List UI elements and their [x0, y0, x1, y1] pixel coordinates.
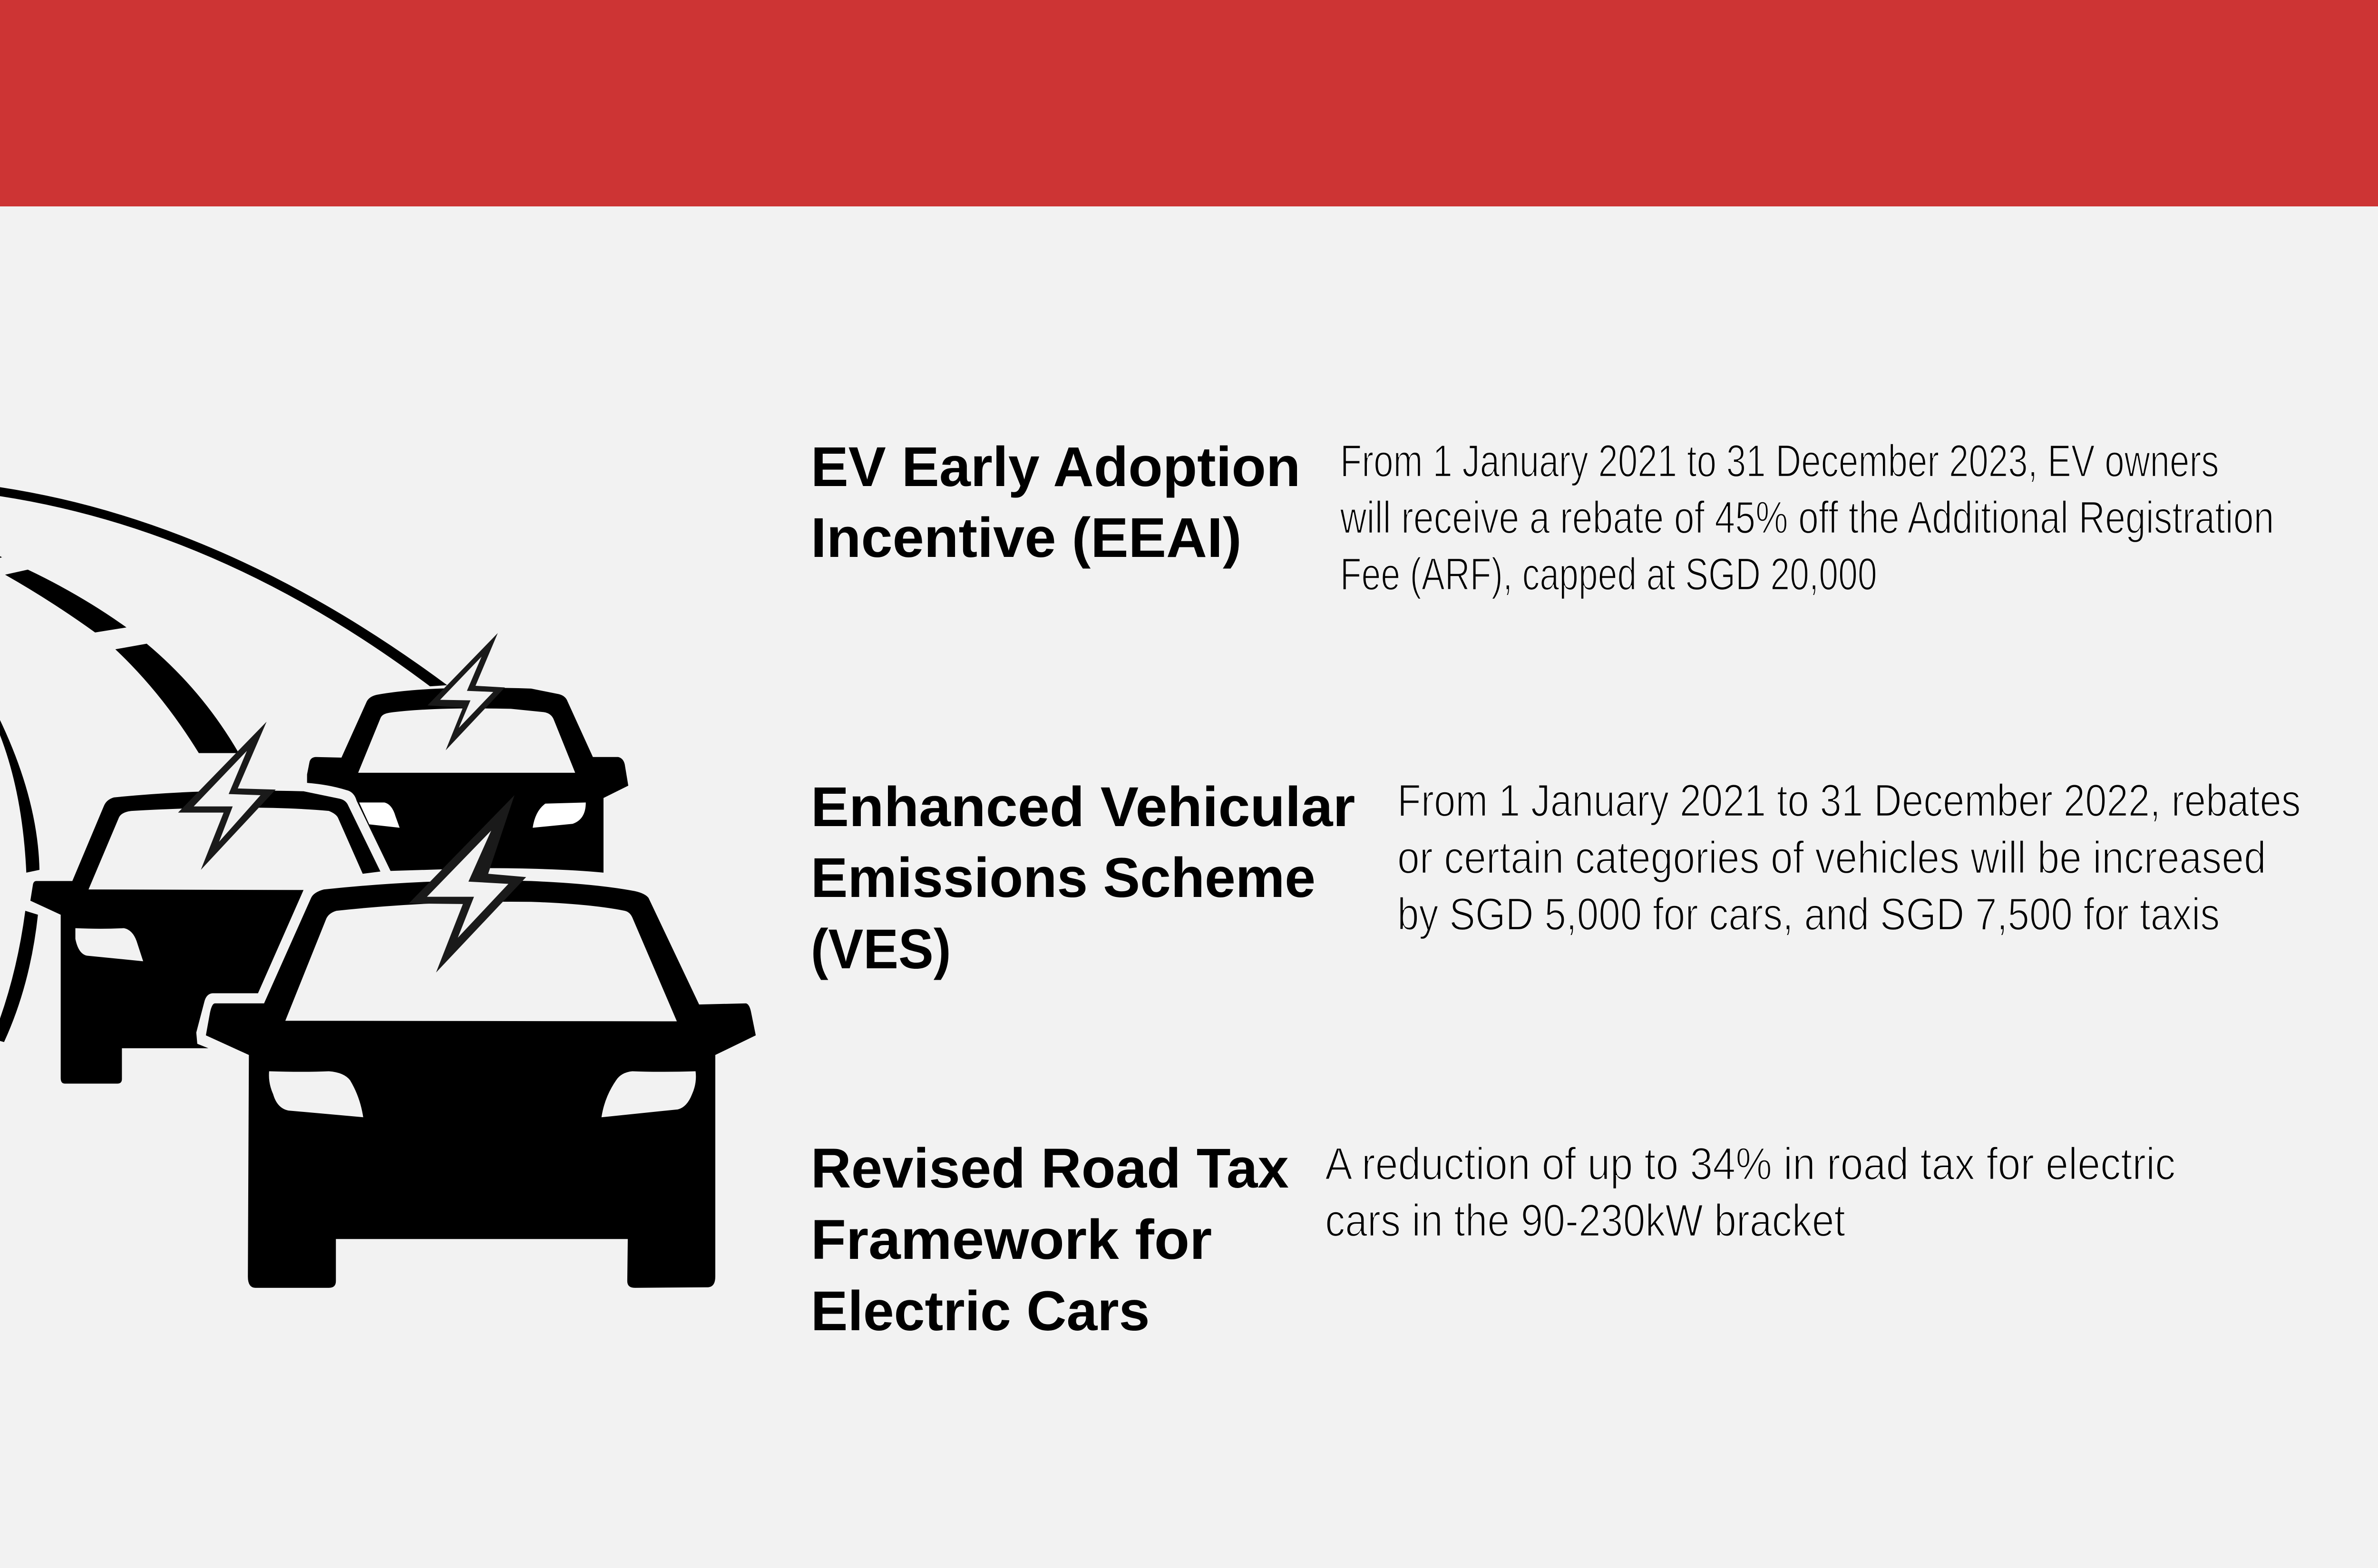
- heading: EV Early Adoption Incentive: [811, 435, 1300, 569]
- heading: Enhanced Vehicular Emissions Scheme: (VES): [811, 917, 951, 981]
- road curves: [0, 487, 447, 1042]
- text block: VES description: From 1 January 2021 to 31 December 2022, rebates: [1397, 775, 2301, 826]
- heading: Enhanced Vehicular Emissions Scheme: Enhanced Vehicular: [811, 775, 1355, 838]
- illustration: three electric cars on curving roads: [0, 487, 756, 1288]
- back car: [307, 688, 628, 873]
- heading: Revised Road Tax Framework: Revised Road Tax: [811, 1137, 1289, 1200]
- text block: EEAI description: From 1 January 2021 to 31 December 2023, EV owners: [1340, 436, 2219, 487]
- text block: road tax description: [1325, 1139, 2175, 1246]
- text block: EEAI description: Fee (ARF), capped at SGD 20,000: [1340, 549, 1877, 600]
- heading: EV Early Adoption Incentive: EV Early Adoption: [811, 435, 1300, 498]
- text block: EEAI description: will receive a rebate of 45% off the Additional Registration: [1340, 492, 2274, 543]
- heading: Enhanced Vehicular Emissions Scheme: Emissions Scheme: [811, 846, 1316, 909]
- middle car: [30, 790, 380, 1083]
- heading: Enhanced Vehicular Emissions Scheme: [811, 775, 1355, 981]
- heading: Revised Road Tax Framework: Framework for: [811, 1208, 1212, 1271]
- icon: lightning bolt, back car: [428, 633, 505, 750]
- header band: [0, 0, 2378, 206]
- text block: VES description: [1397, 775, 2301, 940]
- heading: Revised Road Tax Framework: Electric Cars: [811, 1279, 1150, 1343]
- text block: road tax description: A reduction of up to 34% in road tax for electric: [1325, 1139, 2175, 1189]
- text block: EEAI description: [1340, 436, 2274, 600]
- icon: lightning bolt, middle car: [178, 721, 276, 870]
- front car: [206, 880, 756, 1288]
- text block: VES description: by SGD 5,000 for cars, and SGD 7,500 for taxis: [1397, 889, 2220, 940]
- heading: Revised Road Tax Framework: [811, 1137, 1289, 1343]
- text block: road tax description: cars in the 90-230kW bracket: [1325, 1195, 1845, 1246]
- heading: EV Early Adoption Incentive: Incentive (EEAI): [811, 506, 1242, 569]
- icon: lightning bolt, front car: [409, 795, 526, 973]
- text block: VES description: or certain categories of vehicles will be increased: [1397, 832, 2266, 883]
